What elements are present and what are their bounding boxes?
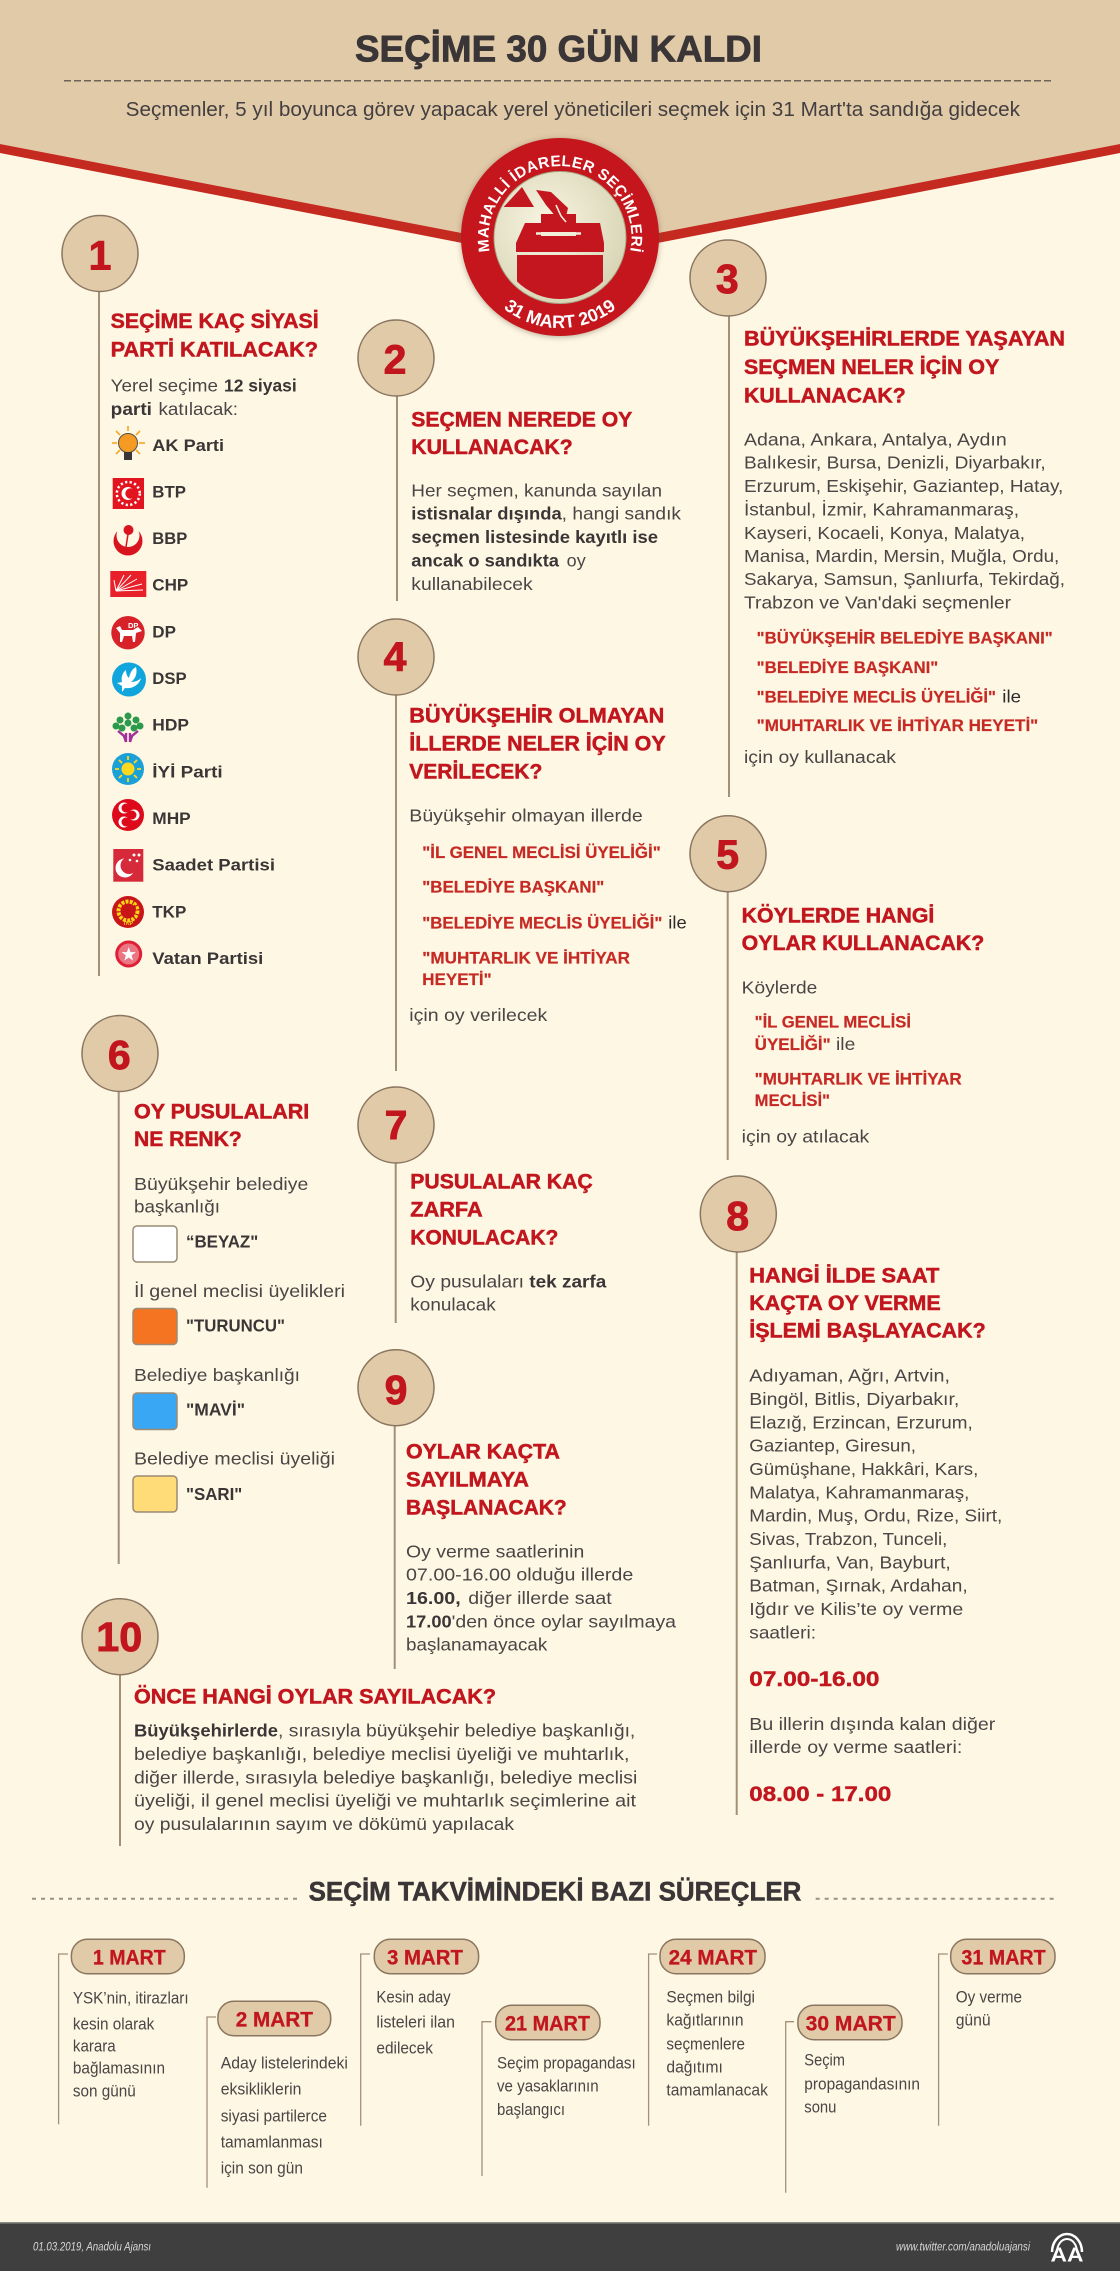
timeline: 1 Mart: karara: [73, 2037, 116, 2056]
body text 2: , hangi sandık: [562, 504, 681, 524]
timeline: 31 Mart: Oy verme: [956, 1987, 1022, 2006]
highlighted vote types 5: "İL GENEL MECLİSİ: [755, 1014, 911, 1032]
party: AK Parti: [112, 426, 224, 460]
footer date and source: 01.03.2019, Anadolu Ajansı: [33, 2242, 151, 2254]
body text 5: Köylerde: [742, 977, 817, 997]
body text 8: Elazığ, Erzincan, Erzurum,: [749, 1412, 973, 1432]
main title: SEÇİME 30 GÜN KALDI: [355, 29, 762, 70]
body text 8: Bingöl, Bitlis, Diyarbakır,: [749, 1389, 959, 1409]
highlighted vote types 5: "MUHTARLIK VE İHTİYAR: [755, 1070, 962, 1088]
medal curved title: MAHALLİ İDARELER SEÇİMLERİ: [478, 155, 644, 252]
timeline: 1 Mart: 1 MART: [93, 1946, 166, 1969]
heading 4: [409, 705, 666, 784]
heading 6: NE RENK?: [134, 1128, 242, 1151]
heading 4: BÜYÜKŞEHİR OLMAYAN: [409, 705, 664, 728]
heading 7: ZARFA: [410, 1199, 483, 1222]
heading 1: SEÇİME KAÇ SİYASİ: [111, 310, 319, 333]
heading 8: KAÇTA OY VERME: [749, 1292, 941, 1315]
party: TKP: TKP: [123, 921, 134, 927]
footer bar: [0, 2222, 1120, 2271]
body text 8: Malatya, Kahramanmaraş,: [749, 1482, 969, 1502]
party list: [110, 426, 275, 968]
timeline: 2 Mart: için son gün: [221, 2158, 303, 2177]
party: CHP: CHP: [152, 576, 188, 595]
medal curved date: 31 MART 2019: [505, 300, 614, 328]
highlighted vote types 4: "MUHTARLIK VE İHTİYAR: [422, 950, 630, 968]
heading 8: İŞLEMİ BAŞLAYACAK?: [749, 1320, 986, 1343]
body text 9: 07.00-16.00 olduğu illerde: [406, 1565, 633, 1585]
timeline: 1 Mart: son günü: [73, 2082, 136, 2101]
heading 5: [742, 904, 984, 955]
heading 9: [406, 1440, 567, 1519]
other provinces text: illerde oy verme saatleri:: [749, 1737, 962, 1757]
number badge 8: 8: [726, 1193, 749, 1239]
timeline: 31 Mart: günü: [956, 2011, 991, 2030]
panel: 8 opening hours: [700, 1176, 1002, 1815]
timeline: 2 Mart: tamamlanması: [221, 2132, 323, 2151]
party: Saadet Partisi: [113, 849, 275, 882]
number badge 4: [358, 619, 434, 695]
panel: 7 envelopes: [358, 1087, 607, 1323]
highlighted vote types 4: HEYETİ": [422, 971, 492, 989]
header band: [0, 0, 1120, 262]
colour: white ballot: “BEYAZ": [186, 1231, 258, 1251]
timeline: 3 Mart: [361, 1939, 479, 2126]
timeline: 24 Mart: [649, 1939, 768, 2126]
heading 7: PUSULALAR KAÇ: [410, 1171, 593, 1194]
party: DP: DP: [128, 621, 138, 630]
number badge 4: 4: [384, 634, 407, 680]
number badge 9: 9: [385, 1367, 407, 1413]
timeline: 21 Mart: ve yasaklarının: [497, 2077, 599, 2096]
colour: orange ballot: İl genel meclisi üyelikleri: [134, 1281, 345, 1301]
body text 7: konulacak: [410, 1295, 496, 1315]
heading 3: [744, 328, 1065, 408]
number badge 5: [690, 816, 766, 892]
intro text 1: [111, 376, 297, 419]
subtitle: Seçmenler, 5 yıl boyunca görev yapacak yerel yöneticileri seçmek için 31 Mart'ta sandığa gidecek: [126, 99, 1021, 121]
intro text 1: parti: [111, 399, 152, 419]
heading 3: KULLANACAK?: [744, 384, 906, 408]
body text 2: kullanabilecek: [411, 574, 533, 594]
body text 8: Adıyaman, Ağrı, Artvin,: [749, 1366, 950, 1386]
body text 3: Kayseri, Kocaeli, Konya, Malatya,: [744, 523, 1025, 543]
colour: blue ballot: [133, 1365, 300, 1430]
other provinces text: Bu illerin dışında kalan diğer: [749, 1714, 995, 1734]
other provinces text: [749, 1714, 995, 1757]
body text 3: İstanbul, İzmir, Kahramanmaraş,: [744, 499, 1019, 519]
timeline: 1 Mart: YSK’nin, itirazları: [73, 1988, 189, 2007]
heading 4: İLLERDE NELER İÇİN OY: [409, 733, 666, 756]
body text 8: saatleri:: [749, 1622, 816, 1642]
party: HDP: HDP: [152, 716, 189, 735]
timeline: 3 Mart: listeleri ilan: [376, 2013, 455, 2032]
number badge 6: 6: [108, 1032, 131, 1078]
body text 7: tek zarfa: [529, 1271, 607, 1291]
party: DP: [111, 616, 176, 649]
heading 1: [111, 310, 319, 362]
number badge 5: 5: [716, 831, 739, 877]
body text 2: oy: [567, 550, 586, 570]
heading 7: [410, 1171, 593, 1250]
heading 9: OYLAR KAÇTA: [406, 1440, 560, 1463]
timeline: 24 Mart: dağıtımı: [666, 2058, 723, 2077]
body text 10: Büyükşehirlerde: [134, 1721, 278, 1741]
party: TKP: TKP: [152, 902, 186, 921]
icon: ballot box and hand: [504, 187, 604, 305]
colour: orange ballot: [133, 1281, 345, 1344]
timeline: 3 Mart: Kesin aday: [376, 1988, 451, 2007]
heading 8: HANGİ İLDE SAAT: [749, 1264, 939, 1287]
panel: 9 counting start: [358, 1350, 676, 1669]
timeline: 31 Mart: [939, 1939, 1055, 2126]
body text 3: Balıkesir, Bursa, Denizli, Diyarbakır,: [744, 453, 1046, 473]
heading 5: OYLAR KULLANACAK?: [742, 932, 984, 955]
body text 10: oy pusulalarının sayım ve dökümü yapılacak: [134, 1814, 514, 1834]
body text 3: Trabzon ve Van'daki seçmenler: [744, 593, 1011, 613]
timeline: 24 Mart: 24 MART: [669, 1946, 757, 1969]
body text 3: Adana, Ankara, Antalya, Aydın: [744, 429, 1007, 449]
panel: 2 where to vote: [358, 320, 681, 601]
intro text 1: 12 siyasi: [224, 376, 297, 396]
body text 8: [749, 1366, 1002, 1642]
body text 2: istisnalar dışında: [411, 504, 562, 524]
highlighted vote types 4: "İL GENEL MECLİSİ ÜYELİĞİ": [422, 843, 661, 862]
closing text 3: için oy kullanacak: [744, 747, 896, 767]
highlighted vote types 5: ÜYELİĞİ": [755, 1035, 831, 1054]
timeline: 1 Mart: [59, 1939, 189, 2124]
timeline: 21 Mart: Seçim propagandası: [497, 2053, 636, 2072]
timeline: 30 Mart: Seçim: [804, 2051, 845, 2070]
colour: blue ballot: Belediye başkanlığı: [134, 1365, 300, 1385]
body text 8: Gaziantep, Giresun,: [749, 1436, 916, 1456]
closing text 5: için oy atılacak: [742, 1127, 870, 1147]
number badge 3: 3: [716, 256, 739, 302]
timeline: 3 Mart: edilecek: [376, 2038, 433, 2057]
panel: 5 villages: [690, 816, 984, 1160]
panel: 3 metropolitan voters: [690, 240, 1065, 797]
highlighted vote types 5: [755, 1014, 962, 1110]
section heading: calendar: SEÇİM TAKVİMİNDEKİ BAZI SÜREÇLER: [309, 1877, 801, 1907]
party: İYİ Parti: İYİ Parti: [152, 762, 223, 781]
highlighted vote types 5: MECLİSİ": [755, 1092, 830, 1110]
number badge 3: [690, 240, 766, 316]
timeline: 24 Mart: Seçmen bilgi: [666, 1988, 755, 2007]
body text 3: Manisa, Mardin, Mersin, Muğla, Ordu,: [744, 546, 1059, 566]
timeline: 3 Mart: 3 MART: [387, 1946, 463, 1969]
colour: orange ballot: "TURUNCU": [186, 1316, 285, 1336]
party: Vatan Partisi: [115, 940, 263, 968]
highlighted vote types 5: ile: [836, 1034, 855, 1054]
highlighted vote types 4: "BELEDİYE BAŞKANI": [422, 878, 604, 896]
party: Vatan Partisi: Vatan Partisi: [152, 949, 263, 968]
party: AK Parti: AK Parti: [152, 436, 224, 455]
closing text 4: için oy verilecek: [409, 1005, 548, 1025]
timeline: 2 Mart: siyasi partilerce: [221, 2107, 327, 2126]
timeline: 21 Mart: [482, 2005, 636, 2176]
number badge 8: [700, 1176, 776, 1252]
highlighted vote types 3: "BÜYÜKŞEHİR BELEDİYE BAŞKANI": [757, 629, 1053, 648]
body text 3: Sakarya, Samsun, Şanlıurfa, Tekirdağ,: [744, 569, 1065, 589]
panel: 4 non-metropolitan: [358, 619, 687, 1071]
party: MHP: [112, 799, 191, 831]
heading 5: KÖYLERDE HANGİ: [742, 904, 934, 927]
number badge 7: [358, 1087, 434, 1163]
highlighted vote types 3: "BELEDİYE MECLİS ÜYELİĞİ": [757, 688, 996, 706]
body text 10: [134, 1721, 637, 1834]
body text 8: Mardin, Muş, Ordu, Rize, Siirt,: [749, 1506, 1002, 1526]
timeline: 30 Mart: [786, 2005, 920, 2193]
body text 9: Oy verme saatlerinin: [406, 1541, 584, 1561]
party: BTP: [113, 478, 186, 509]
highlighted vote types 3: ile: [1002, 686, 1021, 706]
party: Saadet Partisi: Saadet Partisi: [152, 856, 275, 875]
timeline: 30 Mart: 30 MART: [806, 2013, 896, 2036]
colour: white ballot: Büyükşehir belediye: [134, 1174, 308, 1194]
panel: 1 parties: [62, 216, 319, 976]
colour: yellow ballot: "SARI": [186, 1484, 242, 1504]
party: CHP: [110, 571, 188, 597]
heading 2: SEÇMEN NEREDE OY: [411, 408, 632, 431]
timeline: 30 Mart: propagandasının: [804, 2074, 920, 2093]
heading 6: OY PUSULALARI: [134, 1100, 309, 1124]
body text 10: , sırasıyla büyükşehir belediye başkanlığı,: [278, 1721, 635, 1741]
body text 2: ancak o sandıkta: [411, 550, 559, 570]
party: MHP: MHP: [152, 809, 191, 828]
timeline: 2 Mart: eksikliklerin: [221, 2079, 301, 2098]
body text 7: Oy pusulaları: [410, 1271, 524, 1291]
heading 6: [134, 1100, 309, 1151]
heading 8: [749, 1264, 986, 1343]
body text 9: başlanamayacak: [406, 1635, 548, 1655]
number badge 10: 10: [96, 1614, 142, 1660]
body text 8: Gümüşhane, Hakkâri, Kars,: [749, 1459, 978, 1479]
timeline: 24 Mart: kağıtlarının: [666, 2011, 744, 2030]
intro text 1: katılacak:: [158, 399, 238, 419]
heading 9: BAŞLANACAK?: [406, 1496, 567, 1519]
heading 3: BÜYÜKŞEHİRLERDE YAŞAYAN: [744, 328, 1065, 351]
timeline: 2 Mart: Aday listelerindeki: [221, 2053, 348, 2072]
highlighted vote types 4: [422, 843, 687, 989]
emblem: Mahalli İdareler Seçimleri medal: [458, 136, 662, 341]
highlighted vote types 4: ile: [668, 913, 687, 933]
party: DSP: DSP: [152, 669, 187, 688]
timeline: 31 Mart: 31 MART: [961, 1946, 1046, 1969]
colour: blue ballot: "MAVİ": [186, 1400, 245, 1420]
highlighted vote types 3: "BELEDİYE BAŞKANI": [757, 659, 938, 677]
number badge 2: [358, 320, 434, 396]
highlighted vote types 3: [757, 629, 1053, 735]
body text 2: Her seçmen, kanunda sayılan: [411, 481, 662, 501]
timeline: 2 Mart: [207, 2001, 348, 2188]
body text 2: [411, 481, 681, 594]
body text 10: diğer illerde, sırasıyla belediye başkanlığı, belediye meclisi: [134, 1767, 637, 1787]
colour: white ballot: başkanlığı: [134, 1197, 220, 1217]
body text 8: Sivas, Trabzon, Tunceli,: [749, 1529, 947, 1549]
number badge 7: 7: [385, 1102, 407, 1148]
party: HDP: [112, 712, 189, 742]
panel: 10 counting order: [82, 1599, 637, 1846]
heading 10: ÖNCE HANGİ OYLAR SAYILACAK?: [134, 1685, 496, 1708]
timeline: 21 Mart: 21 MART: [505, 2013, 590, 2036]
timeline: 24 Mart: tamamlanacak: [666, 2081, 768, 2100]
icon: AA logo: AA: [1050, 2244, 1084, 2266]
heading 4: VERİLECEK?: [409, 761, 542, 784]
party: DSP: [112, 662, 187, 696]
time range 07.00-16.00: 07.00-16.00: [749, 1668, 880, 1691]
highlighted vote types 4: "BELEDİYE MECLİS ÜYELİĞİ": [422, 914, 662, 933]
heading 3: SEÇMEN NELER İÇİN OY: [744, 356, 999, 379]
colour: white ballot: [133, 1174, 308, 1262]
timeline: 21 Mart: başlangıcı: [497, 2100, 565, 2119]
icon: AA logo: [1050, 2234, 1084, 2266]
time range 08.00 - 17.00: 08.00 - 17.00: [749, 1783, 891, 1806]
number badge 6: [82, 1016, 158, 1092]
timeline: 1 Mart: kesin olarak: [73, 2014, 155, 2033]
body text 8: Şanlıurfa, Van, Bayburt,: [749, 1552, 951, 1572]
body text 9: diğer illerde saat: [468, 1588, 612, 1608]
footer twitter url: www.twitter.com/anadoluajansi: [896, 2242, 1030, 2254]
body text 8: Batman, Şırnak, Ardahan,: [749, 1576, 968, 1596]
body text 9: 16.00,: [406, 1588, 461, 1608]
body text 7: [410, 1271, 607, 1315]
panel: 6 ballot colours: [82, 1016, 345, 1564]
body text 10: belediye başkanlığı, belediye meclisi üyeliği ve muhtarlık,: [134, 1744, 629, 1764]
party: DP: DP: [152, 622, 176, 641]
heading 9: SAYILMAYA: [406, 1469, 529, 1492]
body text 10: üyeliği, il genel meclisi üyeliği ve muhtarlık seçimlerine ait: [134, 1791, 636, 1811]
timeline: 24 Mart: seçmenlere: [666, 2034, 745, 2053]
heading 2: KULLANACAK?: [411, 436, 573, 459]
timeline: 30 Mart: sonu: [804, 2097, 836, 2116]
colour: yellow ballot: [133, 1449, 335, 1512]
timeline: 2 Mart: 2 MART: [236, 2009, 313, 2032]
body text 8: Iğdır ve Kilis’te oy verme: [749, 1599, 963, 1619]
colour: yellow ballot: Belediye meclisi üyeliği: [134, 1449, 335, 1469]
highlighted vote types 3: "MUHTARLIK VE İHTİYAR HEYETİ": [757, 717, 1038, 735]
number badge 1: [62, 216, 138, 292]
number badge 10: [82, 1599, 158, 1675]
body text 3: Erzurum, Eskişehir, Gaziantep, Hatay,: [744, 476, 1063, 496]
number badge 1: 1: [89, 232, 111, 278]
body text 4: Büyükşehir olmayan illerde: [409, 805, 643, 825]
body text 9: 17.00: [406, 1611, 452, 1631]
body text 9: 'den önce oylar sayılmaya: [452, 1611, 676, 1631]
body text 2: seçmen listesinde kayıtlı ise: [411, 527, 658, 547]
party: BBP: BBP: [152, 529, 187, 548]
party: İYİ Parti: [112, 753, 223, 785]
body text 9: [406, 1541, 676, 1655]
heading 2: [411, 408, 632, 459]
body text 3: [744, 429, 1065, 613]
timeline: 1 Mart: bağlamasının: [73, 2058, 165, 2077]
party: TKP: [112, 896, 186, 928]
number badge 2: 2: [384, 337, 406, 383]
heading 7: KONULACAK?: [410, 1227, 558, 1250]
party: BTP: BTP: [152, 482, 186, 501]
number badge 9: [358, 1350, 434, 1426]
party: BBP: [114, 524, 187, 556]
intro text 1: Yerel seçime: [111, 376, 218, 396]
heading 1: PARTİ KATILACAK?: [111, 339, 318, 362]
